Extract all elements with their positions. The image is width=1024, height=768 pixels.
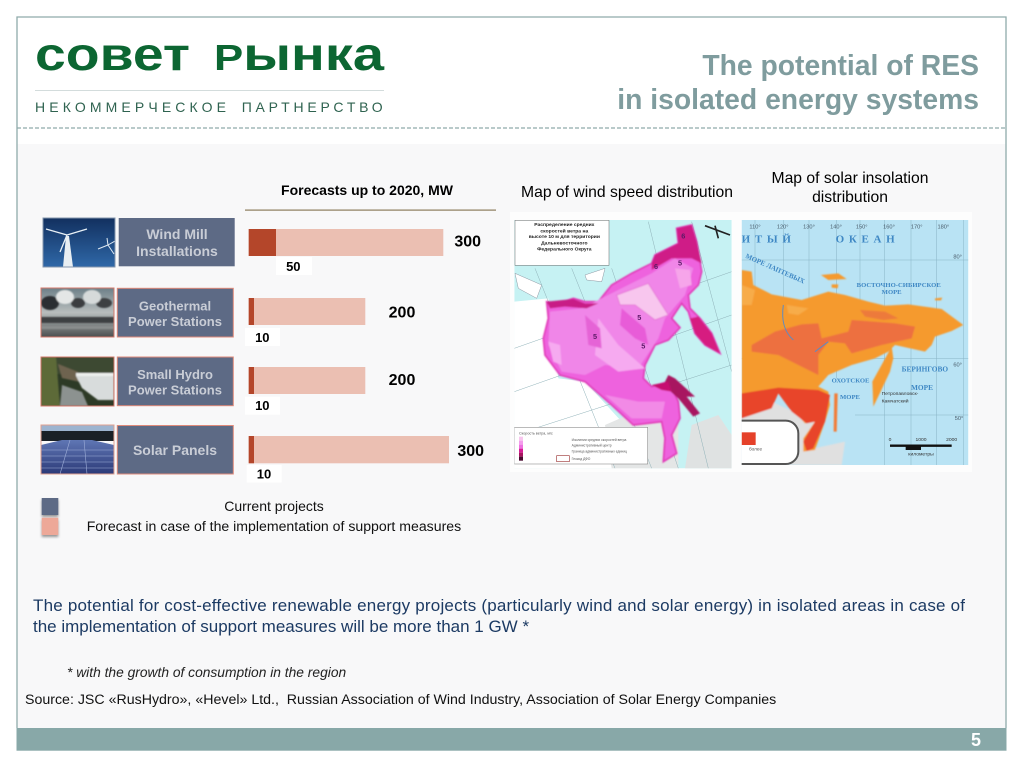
solar map scale bar: 1000 [915, 437, 927, 443]
value: geothermal forecast: 200 [389, 304, 415, 322]
value: solar forecast: 300 [457, 443, 484, 460]
body text: the implementation of support measures will be more than 1 GW * [33, 617, 529, 636]
logo: Sovet Rynka: совет [35, 28, 190, 80]
solar map longitudes: Петропавловск- [882, 391, 919, 397]
solar map legend box [742, 420, 800, 465]
wind map title box: скоростей ветра на [540, 227, 588, 234]
title: in isolated energy systems [617, 83, 979, 115]
value: geothermal current [245, 328, 280, 346]
value: solar current [247, 465, 282, 482]
value: wind mill current [276, 257, 312, 275]
row: geothermal power stations [41, 288, 415, 346]
legend [42, 498, 461, 535]
photo: small hydro dam [41, 357, 114, 406]
wind map numbers: 5 [641, 341, 645, 350]
label: small hydro: Power Stations [128, 382, 222, 397]
bar: geothermal [249, 298, 365, 325]
legend text: forecast: Forecast in case of the implementation of support measures [87, 518, 461, 534]
solar map scale bar: 2000 [946, 437, 957, 443]
solar map scale bar: километры [908, 452, 934, 458]
wind map numbers [593, 231, 685, 350]
southern neighbours [742, 402, 845, 465]
value: small hydro current [245, 397, 280, 415]
solar map heading [772, 170, 928, 206]
value: small hydro forecast: 200 [389, 372, 415, 389]
wind map title box: Федерального Округа [537, 247, 592, 253]
solar map heading: Map of solar insolation [772, 170, 928, 187]
wind map numbers: 6 [681, 231, 685, 240]
solar map labels: МОРЕ [840, 394, 861, 401]
solar map legend box: более [749, 447, 762, 452]
wind map numbers: 5 [678, 259, 682, 268]
solar map labels: ВОСТОЧНО-СИБИРСКОЕ [857, 282, 941, 289]
solar map labels: ОКЕАН [836, 233, 899, 245]
wind map heading: Map of wind speed distribution [521, 184, 733, 201]
label: solar panels [117, 426, 233, 474]
row: small hydro power stations [41, 357, 415, 415]
photo: solar panel field [41, 425, 114, 474]
wind map title box: Дальневосточного [541, 240, 588, 246]
page number: 5 [971, 730, 981, 750]
solar map longitudes: 60° [953, 363, 962, 369]
logo: Sovet Rynka: Рынка [214, 28, 384, 80]
land: islands [821, 273, 942, 300]
value: small hydro current: 10 [255, 398, 270, 413]
value: geothermal current: 10 [255, 330, 270, 345]
solar map scale bar: 0 [889, 437, 892, 443]
wind map numbers: 6 [654, 262, 658, 271]
land: orange insolation zone [742, 270, 963, 452]
row: solar panels [41, 425, 484, 482]
row: wind mill installations [43, 218, 481, 275]
land: kamchatka [872, 347, 893, 407]
logo: Sovet Rynka: НЕКОММЕРЧЕСКОЕ [35, 99, 226, 115]
wind map legend box: Граница административных единиц [572, 450, 627, 454]
map: solar insolation distribution [742, 220, 968, 465]
body text: The potential for cost-effective renewable energy projects (particularly wind and solar energy) in isolated areas in case of [33, 596, 965, 615]
body text [33, 596, 965, 636]
wind map legend box: Геокод ДФО [572, 457, 591, 461]
value: solar current: 10 [257, 467, 271, 482]
solar map longitudes: 50° [955, 416, 963, 422]
content panel background [17, 144, 1006, 728]
wind map north arrow [705, 226, 730, 238]
label: geothermal [117, 288, 233, 337]
solar map longitudes: 140° [830, 224, 842, 230]
solar map labels: МОРЕ [911, 383, 933, 392]
solar map longitudes: 130° [803, 224, 815, 230]
land: red zone [742, 388, 830, 451]
solar map longitudes: 80° [953, 254, 962, 260]
label: small hydro: Small Hydro [137, 367, 213, 382]
wind map legend box [514, 427, 648, 464]
chart heading: Forecasts up to 2020, MW [281, 182, 454, 198]
bar: small hydro [249, 367, 365, 394]
label: wind mill installations: Wind Mill [146, 226, 208, 242]
photo: wind turbines [43, 218, 115, 267]
wind zones: kamchatka [690, 317, 720, 353]
bar: solar panels [249, 436, 449, 463]
solar map scale bar [888, 438, 957, 456]
wind map title box: Распределение средних [534, 222, 595, 228]
rivers [783, 305, 828, 352]
wind map mat [510, 212, 737, 472]
label: geothermal: Power Stations [128, 314, 222, 329]
header dashed rule [17, 127, 1006, 129]
solar map heading: distribution [812, 189, 888, 206]
wind map legend box: Изолинии средних скоростей ветра [572, 438, 626, 442]
footer bar [16, 728, 1006, 751]
wind zones: chukotka [652, 225, 702, 270]
legend swatch: current projects [42, 498, 58, 515]
solar map longitudes: 110° [749, 224, 761, 230]
value: wind mill current: 50 [286, 259, 301, 274]
solar map longitudes [749, 224, 963, 422]
graticule [514, 222, 732, 468]
logo: Sovet Rynka: ПАРТНЕРСТВО [242, 99, 383, 115]
solar map longitudes: 170° [911, 224, 923, 230]
source: Source: JSC «RusHydro», «Hevel» Ltd., Russian Association of Wind Industry, Association of Solar Energy Companies [25, 692, 776, 708]
land: medium red zone [752, 320, 915, 375]
footnote: * with the growth of consumption in the region [67, 665, 346, 680]
legend swatch: forecast [42, 518, 58, 535]
chart heading rule [245, 210, 496, 211]
logo: Sovet Rynka [35, 28, 384, 115]
value: wind mill forecast: 300 [454, 234, 481, 250]
wind zones: district [543, 225, 720, 462]
solar map labels: ОХОТСКОЕ [832, 377, 870, 384]
solar map mat [737, 212, 972, 472]
bar: wind mill [249, 229, 443, 256]
solar map labels: ИТЫЙ [742, 233, 796, 245]
land: lighter orange patches [742, 285, 808, 315]
solar map longitudes: 120° [777, 224, 789, 230]
solar map longitudes: 180° [937, 224, 949, 230]
wind map numbers: 5 [637, 313, 641, 322]
wind map numbers: 5 [593, 332, 597, 341]
wind map title box: высоте 10 м для территории [529, 234, 600, 240]
solar map labels: МОРЕ ЛАПТЕВЫХ [744, 252, 806, 286]
title [617, 49, 979, 115]
map: wind speed distribution [514, 220, 732, 468]
title: The potential of RES [702, 49, 979, 81]
solar map labels: БЕРИНГОВО [902, 365, 948, 374]
label: solar panels: Solar Panels [133, 442, 217, 458]
land outside the district [514, 298, 619, 468]
solar map longitudes: 160° [883, 224, 895, 230]
label: small hydro [117, 357, 233, 406]
wind map title box [515, 220, 609, 265]
solar map labels [742, 233, 948, 401]
solar map longitudes: Камчатский [882, 397, 909, 404]
label: geothermal: Geothermal [139, 298, 211, 314]
photo: geothermal steam [41, 288, 114, 337]
solar map labels: МОРЕ [882, 289, 902, 296]
wind map legend box: Скорость ветра, м/с [519, 432, 553, 436]
wind map legend box: Административный центр [572, 444, 612, 448]
label: wind mill installations [119, 218, 235, 266]
solar map longitudes: 150° [856, 224, 868, 230]
legend text: current projects: Current projects [224, 498, 324, 514]
graticule [742, 220, 968, 465]
wind zones: coast [547, 299, 598, 308]
label: wind mill installations: Installations [136, 243, 218, 259]
